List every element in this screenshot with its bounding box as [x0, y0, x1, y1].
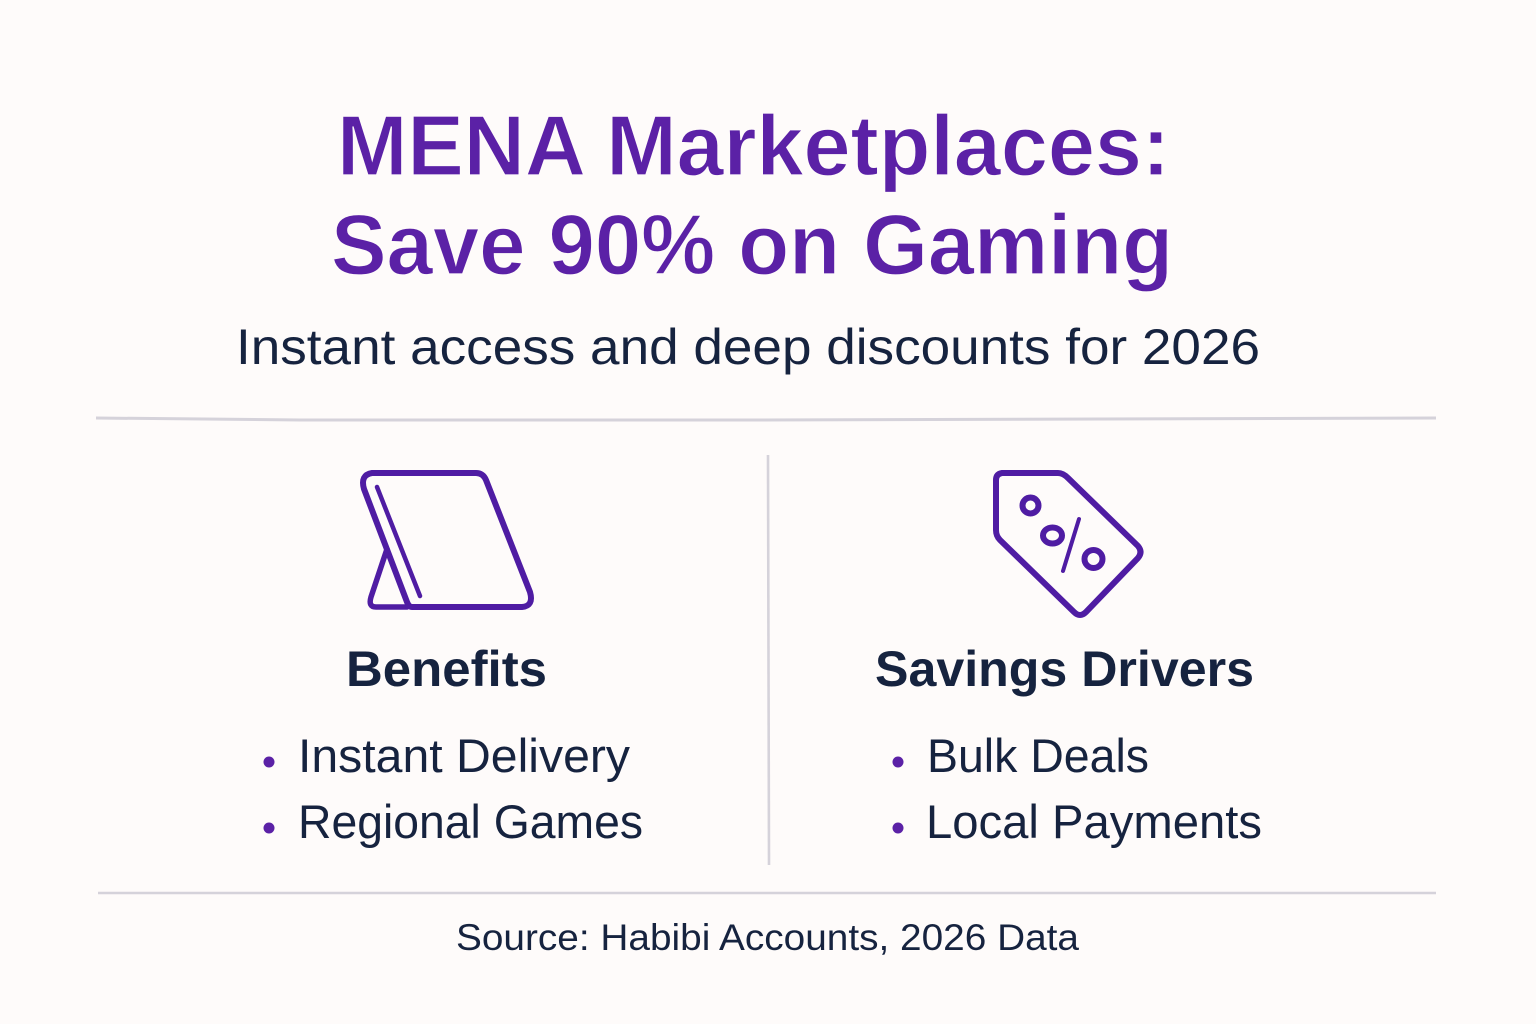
title: MENA Marketplaces: — [337, 99, 1170, 194]
list: benefits — [264, 729, 643, 848]
panel: savings drivers — [875, 473, 1262, 848]
list: savings drivers: Local Payments — [926, 795, 1262, 848]
subtitle: Instant access and deep discounts for 2026 — [236, 319, 1260, 375]
panel: benefits — [264, 473, 643, 848]
list: benefits: Instant Delivery — [298, 729, 631, 782]
title — [331, 99, 1173, 293]
title: Save 90% on Gaming — [331, 198, 1173, 293]
heading: savings drivers: Savings Drivers — [875, 641, 1254, 697]
icon: tablet on stand — [363, 473, 531, 607]
source note: Source: Habibi Accounts, 2026 Data — [456, 917, 1079, 958]
list: savings drivers: Bulk Deals — [927, 729, 1149, 782]
heading: benefits: Benefits — [346, 641, 547, 697]
icon: discount tag — [996, 473, 1140, 615]
list: savings drivers — [892, 729, 1262, 848]
list: benefits: Regional Games — [298, 795, 643, 848]
